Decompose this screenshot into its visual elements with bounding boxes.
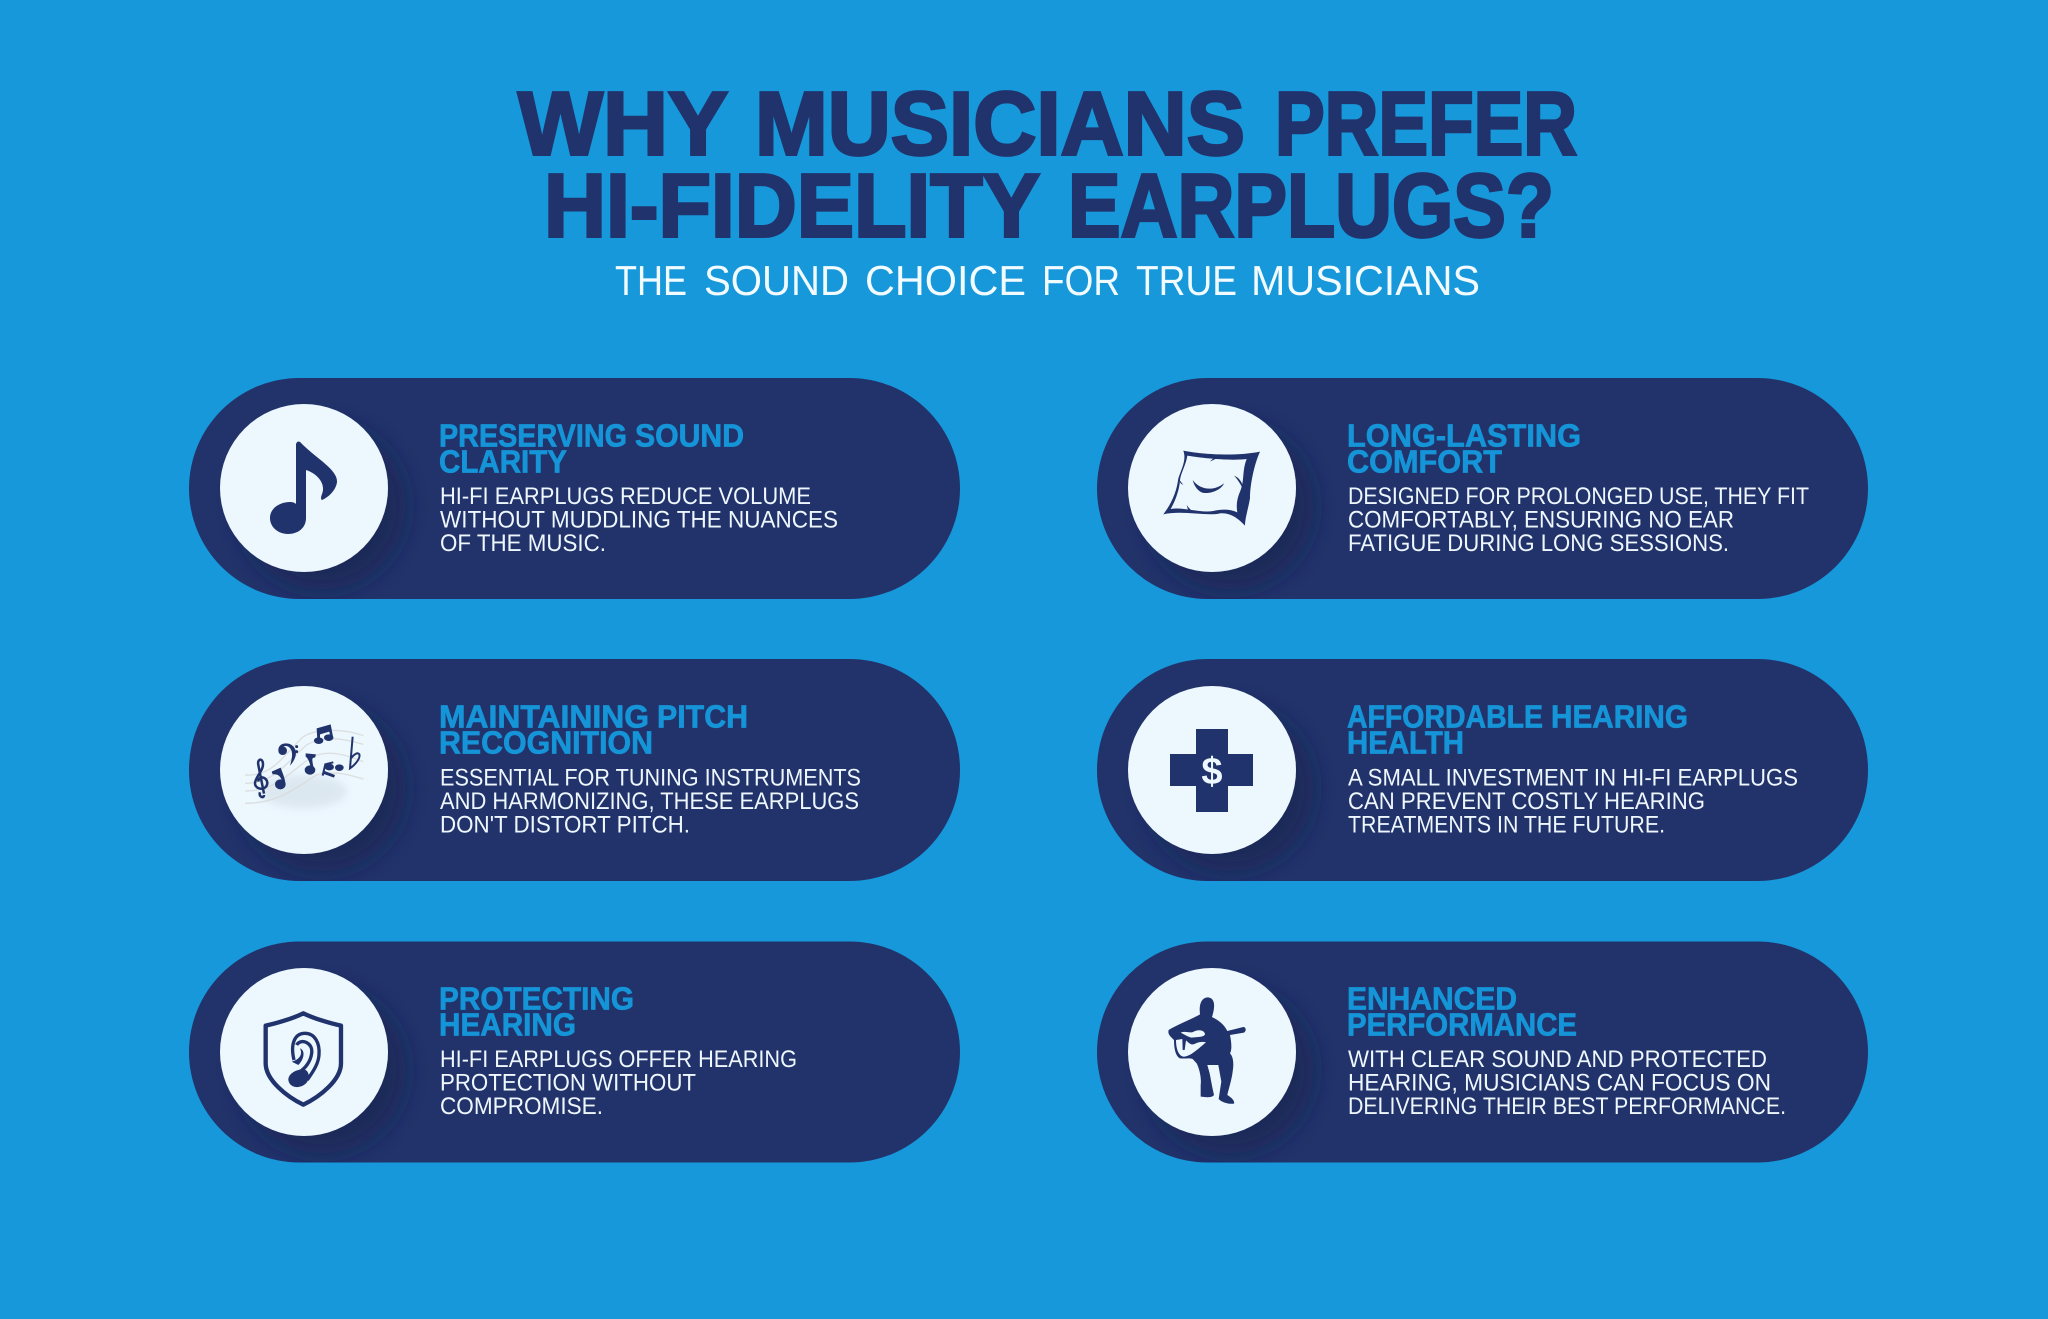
icon: medical cross with dollar: $ — [1201, 751, 1223, 793]
text block — [440, 483, 838, 557]
text block: COMPROMISE. — [440, 1093, 603, 1120]
text block: FATIGUE DURING LONG SESSIONS. — [1348, 530, 1729, 557]
icon: ear shield — [266, 1013, 341, 1105]
text block — [1348, 764, 1798, 838]
text block: CAN PREVENT COSTLY HEARING — [1348, 788, 1705, 815]
heading — [439, 698, 748, 760]
title: WHY — [518, 74, 728, 174]
text block: COMFORTABLY, ENSURING NO EAR — [1348, 506, 1734, 534]
subtitle: SOUND — [704, 257, 849, 304]
heading: LONG-LASTING — [1347, 417, 1581, 453]
subtitle: FOR — [1042, 257, 1120, 304]
heading: SOUND — [635, 417, 744, 453]
subtitle: MUSICIANS — [1251, 257, 1480, 304]
panel: protecting hearing — [189, 942, 960, 1162]
text block — [440, 764, 861, 838]
text block: HI-FI EARPLUGS OFFER HEARING — [440, 1046, 797, 1073]
title: EARPLUGS? — [1068, 156, 1554, 256]
heading: PITCH — [657, 698, 748, 734]
text block — [440, 1046, 797, 1120]
panel: maintaining pitch recognition — [189, 659, 960, 881]
heading: AFFORDABLE — [1347, 698, 1543, 734]
heading: PERFORMANCE — [1347, 1006, 1577, 1042]
text block: TREATMENTS IN THE FUTURE. — [1348, 812, 1665, 838]
heading: HEARING — [439, 1006, 576, 1042]
text block: AND HARMONIZING, THESE EARPLUGS — [440, 788, 859, 815]
panel: enhanced performance — [1097, 942, 1868, 1162]
heading: PROTECTING — [439, 980, 634, 1016]
icon: music note — [270, 442, 337, 534]
heading: PRESERVING — [439, 417, 627, 453]
heading — [1347, 980, 1577, 1042]
title — [518, 74, 1577, 256]
subtitle — [615, 257, 1480, 304]
text block — [1348, 1046, 1786, 1120]
text block: DESIGNED FOR PROLONGED USE, THEY FIT — [1348, 483, 1809, 510]
text block: WITHOUT MUDDLING THE NUANCES — [440, 506, 838, 534]
text block: OF THE MUSIC. — [440, 530, 606, 557]
heading — [1347, 417, 1581, 479]
text block: PROTECTION WITHOUT — [440, 1070, 696, 1096]
title: HI-FIDELITY — [544, 156, 1040, 256]
icon: seated guitarist — [1168, 997, 1246, 1104]
title: MUSICIANS — [755, 74, 1245, 174]
text block: WITH CLEAR SOUND AND PROTECTED — [1348, 1046, 1767, 1073]
heading: CLARITY — [439, 443, 567, 479]
icon: musical score notes — [245, 724, 363, 808]
heading: MAINTAINING — [439, 698, 649, 734]
panel: affordable hearing health — [1097, 659, 1868, 881]
panel: preserving sound clarity — [189, 378, 960, 599]
text block: HI-FI EARPLUGS REDUCE VOLUME — [440, 483, 811, 510]
subtitle: TRUE — [1136, 257, 1237, 304]
text block: DELIVERING THEIR BEST PERFORMANCE. — [1348, 1093, 1786, 1120]
heading — [1347, 698, 1688, 760]
infographic canvas — [189, 90, 1868, 1162]
icon: medical cross with dollar — [1170, 729, 1253, 812]
text block — [1348, 483, 1809, 557]
title: PREFER — [1275, 74, 1577, 174]
icon: pillow — [1163, 451, 1260, 526]
heading: ENHANCED — [1347, 980, 1517, 1016]
heading: COMFORT — [1347, 443, 1502, 479]
panel: long-lasting comfort — [1097, 378, 1868, 599]
text block: A SMALL INVESTMENT IN HI-FI EARPLUGS — [1348, 764, 1798, 792]
heading: HEALTH — [1347, 724, 1464, 760]
text block: ESSENTIAL FOR TUNING INSTRUMENTS — [440, 764, 861, 792]
heading: HEARING — [1551, 698, 1688, 734]
heading — [439, 980, 634, 1042]
subtitle: CHOICE — [865, 257, 1026, 304]
text block: HEARING, MUSICIANS CAN FOCUS ON — [1348, 1070, 1771, 1096]
subtitle: THE — [615, 257, 687, 304]
heading — [439, 417, 744, 479]
text block: DON'T DISTORT PITCH. — [440, 812, 690, 838]
heading: RECOGNITION — [439, 724, 653, 760]
